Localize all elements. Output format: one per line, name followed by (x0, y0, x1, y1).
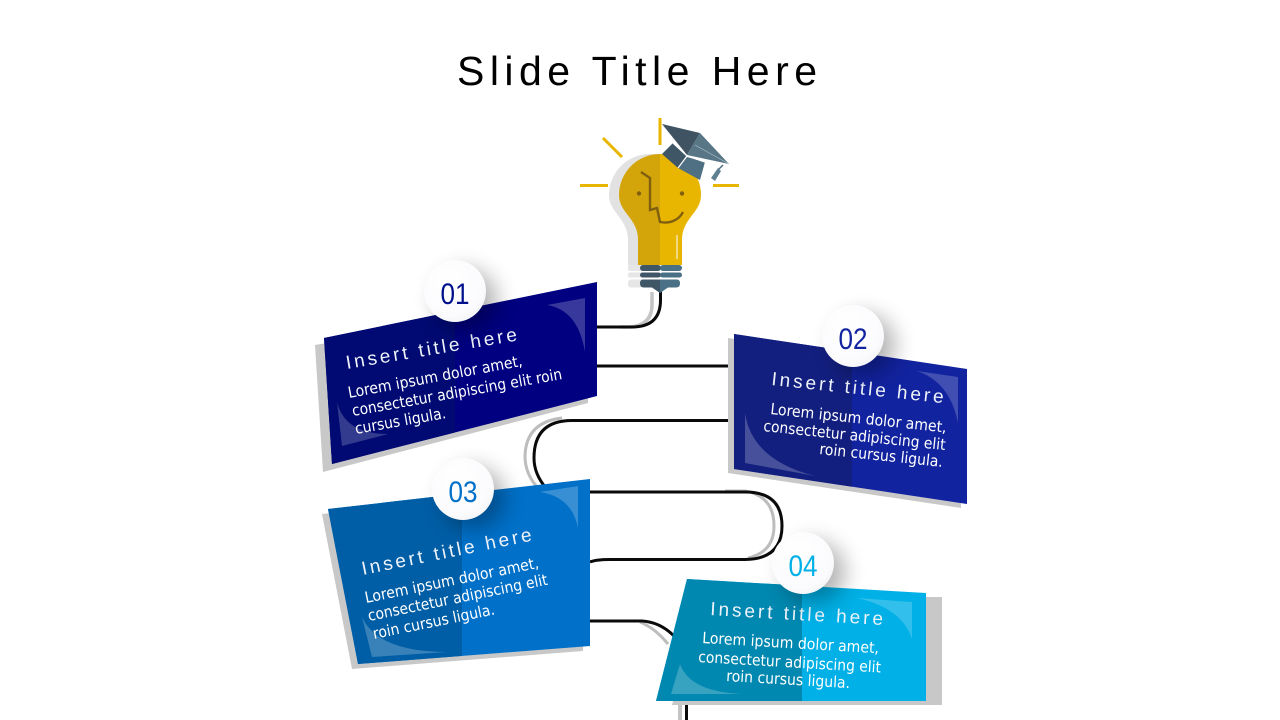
icon: light rays (580, 118, 739, 186)
card 2 body (730, 330, 970, 510)
connector wire (525, 290, 782, 720)
card 2 text (763, 400, 947, 471)
card 1 shadow (315, 300, 588, 472)
card 4 text: roin cursus ligula. (726, 667, 851, 692)
badge 01: 01 (440, 278, 470, 311)
badge 04 (772, 532, 845, 603)
card 4 text: consectetur adipiscing elit (698, 648, 882, 677)
panel: card 2 (728, 330, 970, 510)
card 3 text: Lorem ipsum dolor amet, (363, 554, 540, 607)
panel: card 4 (650, 575, 942, 705)
card 2 heading: Insert title here (770, 369, 945, 408)
icon: face (637, 172, 684, 223)
card 4 shadow (672, 597, 942, 705)
badge 01 (424, 260, 497, 331)
card 4 body (650, 575, 930, 705)
card 2 text: Lorem ipsum dolor amet, (770, 400, 947, 436)
card 1 body (320, 280, 600, 470)
card 2 text: roin cursus ligula. (819, 440, 944, 471)
card 2 text: consectetur adipiscing elit (763, 417, 946, 454)
light bulb with graduation cap (580, 118, 739, 293)
card 1 text: Lorem ipsum dolor amet, (346, 352, 524, 402)
icon: graduation cap (662, 124, 729, 181)
card 3 text: roin cursus ligula. (371, 601, 496, 643)
badge 04: 04 (788, 550, 818, 583)
badge 03 (432, 458, 505, 529)
panel: card 3 (322, 475, 595, 670)
card 1 text: cursus ligula. (354, 404, 447, 438)
card 3 body (325, 475, 595, 670)
card 4 text (698, 629, 882, 692)
badge 02: 02 (838, 323, 868, 356)
card 4 heading: Insert title here (710, 599, 884, 630)
card 4 text: Lorem ipsum dolor amet, (702, 629, 880, 657)
card 1 heading: Insert title here (344, 325, 518, 374)
card 1 text (346, 352, 563, 438)
card 3 text: consectetur adipiscing elit (366, 571, 549, 625)
card 2 shadow (728, 338, 961, 508)
badge 02 (822, 305, 895, 376)
title: Slide Title Here (457, 48, 817, 94)
card 1 text: consectetur adipiscing elit roin (351, 365, 563, 420)
icon: bulb shadow (609, 154, 660, 265)
badge 03: 03 (448, 476, 478, 509)
card 3 heading: Insert title here (360, 525, 534, 580)
panel: card 1 (315, 280, 600, 472)
icon: bulb glass (619, 154, 701, 265)
icon: bulb base (628, 265, 682, 293)
card 3 shadow (322, 484, 583, 669)
card 3 text (363, 554, 549, 643)
